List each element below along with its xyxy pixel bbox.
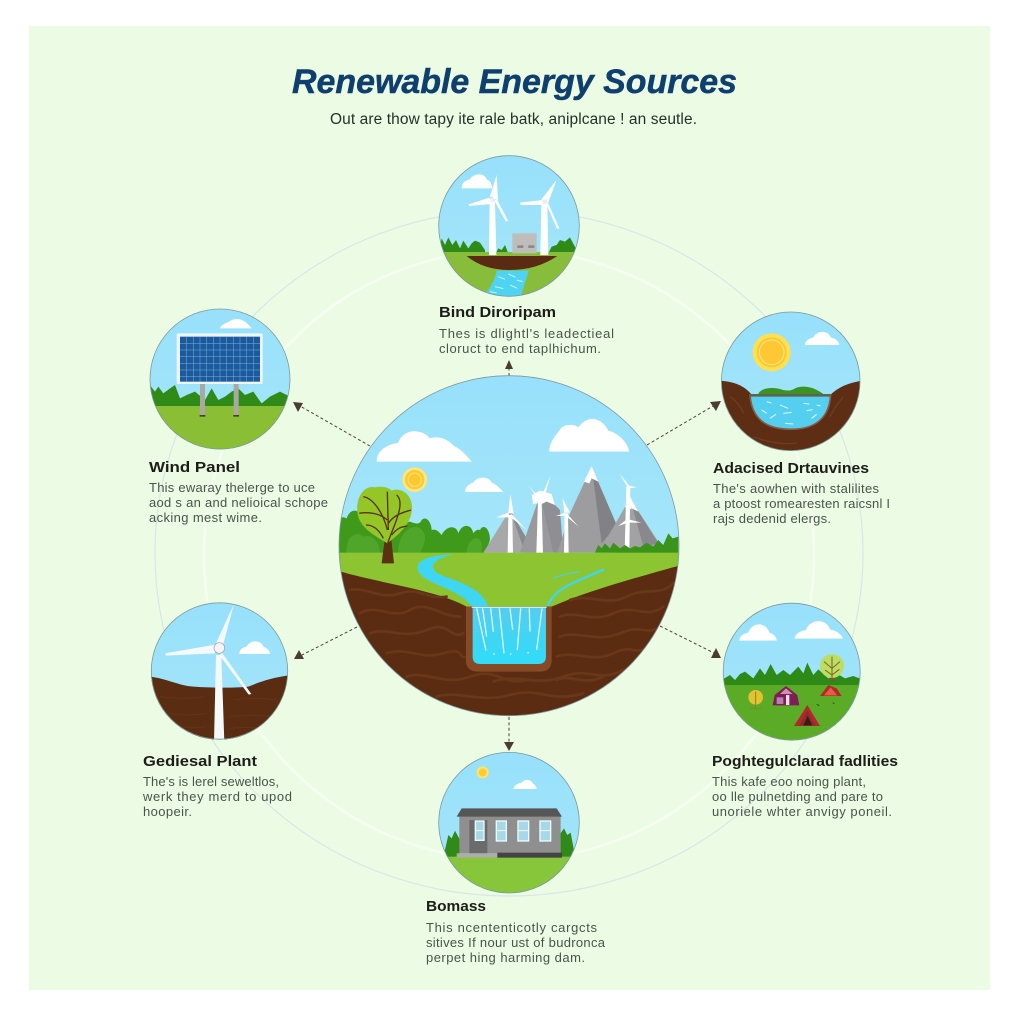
description xyxy=(713,481,890,526)
arrow: to lower left xyxy=(294,627,357,659)
sky xyxy=(337,373,683,560)
heading: Poghtegulclarad fadlities xyxy=(712,754,898,770)
icon: wind turbines scene xyxy=(439,156,579,296)
description: perpet hing harming dam. xyxy=(426,950,585,965)
icon outline xyxy=(439,752,579,893)
icon outline xyxy=(723,603,860,740)
card: bottom source xyxy=(426,750,606,965)
description: hoopeir. xyxy=(143,804,192,819)
description: aod s an and nelioical schope xyxy=(149,495,328,510)
heading: Wind Panel xyxy=(149,460,240,476)
icon outline xyxy=(151,603,288,739)
description: Thes is dlightl's leadectieal xyxy=(439,326,614,341)
icon outline xyxy=(721,312,860,451)
description xyxy=(149,480,328,525)
arrows from centre to sources xyxy=(293,360,721,751)
tree xyxy=(357,487,412,563)
description: This kafe eoo noing plant, xyxy=(712,774,866,789)
card: upper left source xyxy=(147,307,328,525)
card: top source xyxy=(433,153,614,356)
card: lower right source xyxy=(712,600,898,819)
icon: sun and pond scene xyxy=(722,312,860,450)
arrow: to upper left xyxy=(293,402,370,446)
description xyxy=(426,920,606,965)
arrow: to lower right xyxy=(660,626,721,658)
card: lower left source xyxy=(142,600,293,819)
description: unoriele whter anvigy poneil. xyxy=(712,804,892,819)
central landscape illustration xyxy=(337,373,683,718)
icon: single wind turbine scene xyxy=(151,603,288,740)
mountains xyxy=(483,466,658,553)
description: acking mest wime. xyxy=(149,510,262,525)
arrow: to upper right xyxy=(647,401,721,445)
central circle outline xyxy=(339,376,679,716)
grass tufts xyxy=(595,533,678,554)
description: a ptoost romearesten raicsnl I xyxy=(713,496,890,511)
description: oo lle pulnetding and pare to xyxy=(712,789,883,804)
heading: Bomass xyxy=(426,899,486,915)
heading: Adacised Drtauvines xyxy=(713,461,869,477)
icon: forest and tents scene xyxy=(724,604,860,740)
description: This ncententicotly cargcts xyxy=(426,920,598,935)
grass field xyxy=(340,552,678,607)
description: rajs dedenid elergs. xyxy=(713,511,831,526)
arrow: to top xyxy=(505,360,513,376)
title: Renewable Energy Sources xyxy=(292,63,737,101)
forest xyxy=(338,511,490,554)
icon: building scene xyxy=(437,750,583,897)
description: werk they merd to upod xyxy=(142,789,292,804)
icon outline xyxy=(439,156,579,296)
heading: Bind Diroripam xyxy=(439,305,556,321)
right stream xyxy=(547,569,604,606)
wind turbines xyxy=(496,473,642,553)
description: The's aowhen with stalilites xyxy=(713,481,880,496)
description xyxy=(142,774,292,819)
card: upper right source xyxy=(713,310,890,526)
description: This ewaray thelerge to uce xyxy=(149,480,315,495)
soil texture xyxy=(350,583,673,698)
arrow: to bottom xyxy=(504,717,514,751)
river xyxy=(418,554,488,607)
connecting orbit rings xyxy=(155,210,863,896)
water pit xyxy=(466,607,552,672)
icon: solar panel scene xyxy=(147,307,293,453)
sun xyxy=(402,467,427,492)
description xyxy=(439,326,614,356)
clouds xyxy=(377,419,629,492)
soil cross-section xyxy=(338,565,680,718)
icon outline xyxy=(150,309,290,449)
description: sitives If nour ust of budronca xyxy=(426,935,606,950)
description xyxy=(712,774,892,819)
description: The's is lerel seweltlos, xyxy=(143,774,279,789)
subtitle: Out are thow tapy ite rale batk, aniplcane ! an seutle. xyxy=(330,111,697,128)
description: cloruct to end taplhichum. xyxy=(439,341,601,356)
heading: Gediesal Plant xyxy=(143,754,257,770)
